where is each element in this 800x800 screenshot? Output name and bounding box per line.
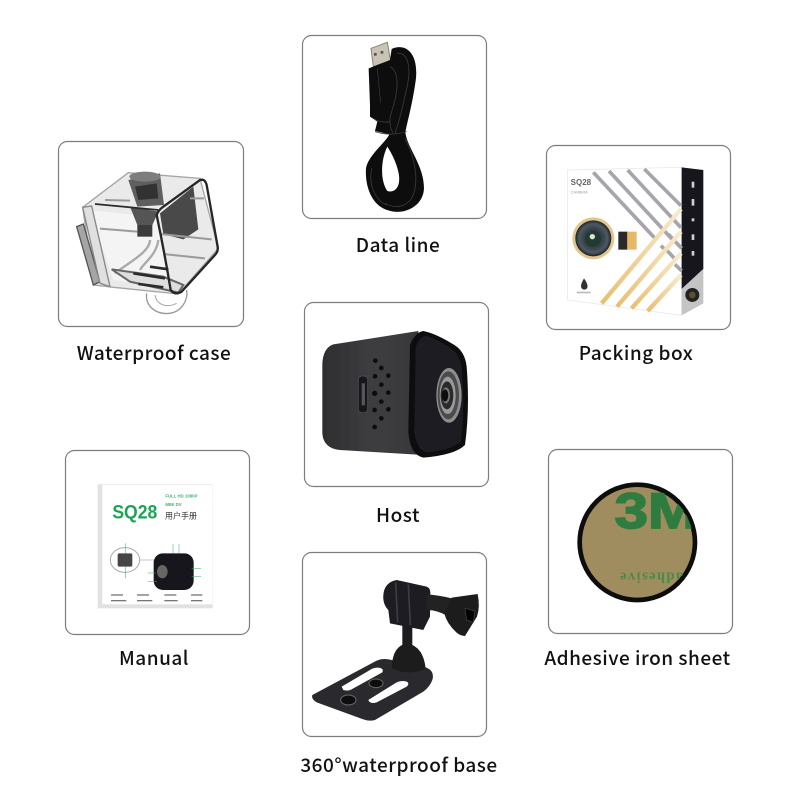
icon: 3M adhesive disc: 3M — [615, 483, 698, 539]
panel: waterproof base — [302, 552, 486, 736]
label: waterproof base: 360°waterproof base — [300, 751, 498, 778]
icon: user manual — [98, 484, 213, 608]
label: adhesive iron sheet: Adhesive iron sheet — [544, 644, 731, 671]
icon: user manual: 用户手册 — [165, 511, 197, 522]
icon: user manual: FULL HD 1080P — [165, 493, 198, 498]
label: data line: Data line — [356, 231, 440, 258]
icon: user manual: MINI DV — [165, 502, 182, 507]
panel: data line — [302, 36, 486, 218]
panel: manual — [66, 450, 250, 634]
panel: host — [304, 302, 488, 486]
panel: adhesive iron sheet — [548, 450, 732, 634]
label: manual: Manual — [119, 644, 189, 671]
label: waterproof case: Waterproof case — [77, 339, 231, 366]
panel: waterproof case — [58, 142, 244, 326]
icon: user manual: SQ28 — [112, 503, 158, 524]
icon: packing box: SQ28 — [571, 178, 592, 187]
icon: 3M adhesive disc: adhesive — [620, 569, 683, 585]
label: packing box: Packing box — [579, 339, 693, 366]
icon: 3M adhesive disc — [580, 483, 698, 600]
icon: host camera — [322, 331, 468, 458]
panel: packing box — [546, 146, 730, 330]
icon: packing box — [567, 167, 703, 315]
icon: 360 degree base mount — [312, 580, 479, 721]
label: host: Host — [376, 501, 420, 528]
icon: packing box: CAMERA — [571, 189, 588, 194]
icon: transparent waterproof case — [77, 172, 218, 314]
icon: USB data cable — [366, 42, 424, 212]
